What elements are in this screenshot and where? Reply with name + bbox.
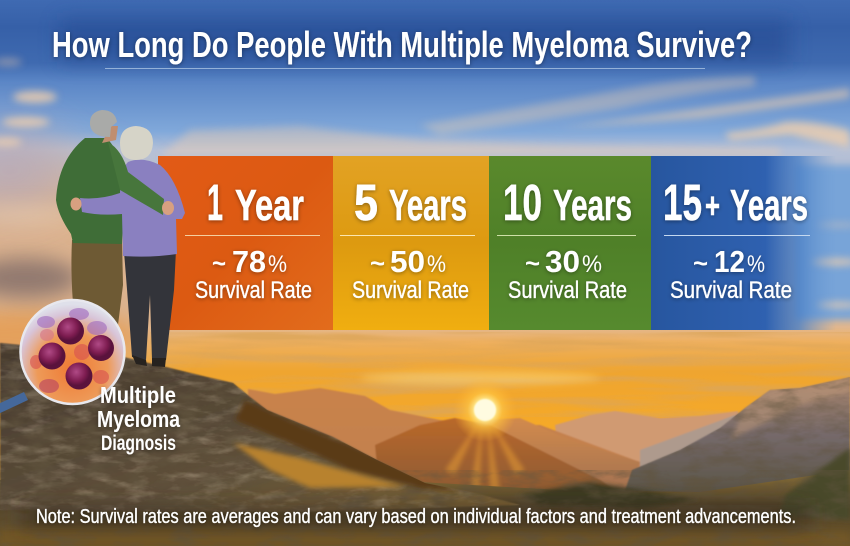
value: 50%: ~ <box>370 248 385 278</box>
value: 50% <box>370 244 446 279</box>
label: survival rate: Survival Rate <box>670 277 792 304</box>
heading: 1 Year: 1 <box>207 174 223 231</box>
heading: 1 Year: Year <box>235 181 304 230</box>
value: 12%: % <box>747 251 765 278</box>
man's arm around woman <box>108 142 164 215</box>
note background shade <box>20 505 810 529</box>
label: survival rate: Survival Rate <box>195 277 312 304</box>
woman <box>70 126 185 367</box>
value: 50%: 50 <box>390 244 425 279</box>
value: 30%: % <box>582 251 602 278</box>
value: 30% <box>525 244 602 279</box>
value: 78%: ~ <box>212 248 226 278</box>
label: multiple myeloma diagnosis: Multiple <box>100 382 176 408</box>
value: 78% <box>212 244 287 279</box>
heading: 15+ Years: + <box>705 185 720 226</box>
value: 12%: ~ <box>693 248 708 278</box>
heading: 5 Years: Years <box>389 181 467 230</box>
title rule <box>105 68 705 69</box>
hillside with rock outcrop <box>0 340 520 512</box>
value: 50%: % <box>427 251 446 278</box>
heading: 1 Year <box>207 174 304 231</box>
man's hand <box>162 201 174 215</box>
panel: 10 Years <box>489 156 651 330</box>
value: 78%: 78 <box>232 244 266 279</box>
icon: magnifying glass with myeloma cells <box>0 300 124 414</box>
label: multiple myeloma diagnosis <box>97 382 180 455</box>
heading: 5 Years <box>354 174 467 231</box>
label: survival rate: Survival Rate <box>508 277 627 304</box>
heading: 5 Years: 5 <box>354 174 378 231</box>
sun <box>445 378 525 490</box>
man <box>56 110 124 325</box>
illustration: elderly couple <box>56 110 185 367</box>
label: survival rate: Survival Rate <box>352 277 469 304</box>
heading: 10 Years <box>503 174 632 231</box>
value: 12% <box>693 244 765 279</box>
value: 12%: 12 <box>714 244 745 279</box>
mountain range right <box>626 376 850 492</box>
panel: 5 Years <box>333 156 489 330</box>
sky streaks <box>150 332 850 417</box>
distant mountains <box>248 388 745 497</box>
heading: 15+ Years: 15 <box>663 174 702 231</box>
panel: 1 Year <box>158 156 333 330</box>
panel: 15+ Years <box>651 156 836 330</box>
heading: 15+ Years <box>663 174 808 231</box>
heading: 10 Years: 10 <box>503 174 542 231</box>
label: multiple myeloma diagnosis: Diagnosis <box>101 432 176 455</box>
value: 78%: % <box>268 251 287 278</box>
value: 30%: ~ <box>525 248 540 278</box>
heading: 10 Years: Years <box>553 181 632 230</box>
label: multiple myeloma diagnosis: Myeloma <box>97 406 180 432</box>
foreground meadow <box>0 448 850 546</box>
value: 30%: 30 <box>545 244 580 279</box>
heading: 15+ Years: Years <box>730 181 808 230</box>
